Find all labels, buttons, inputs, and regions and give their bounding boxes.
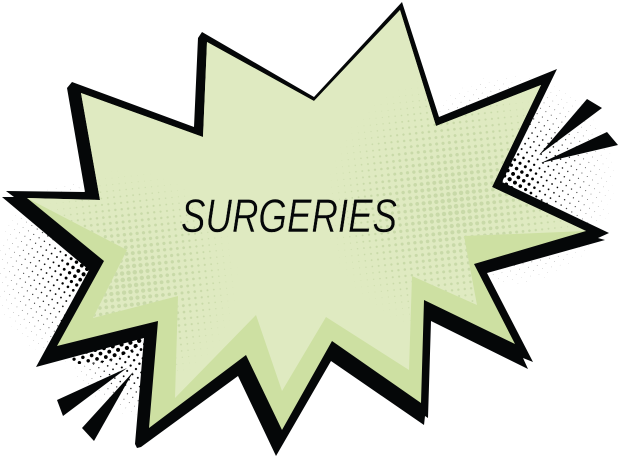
halftone dots behind burst xyxy=(0,76,614,415)
burst lines: upper right xyxy=(539,99,618,163)
halftone shading on burst xyxy=(51,89,574,371)
burst lines: lower left xyxy=(57,368,133,441)
burst lighter green fill xyxy=(27,10,586,398)
title: SURGERIES xyxy=(181,189,397,242)
